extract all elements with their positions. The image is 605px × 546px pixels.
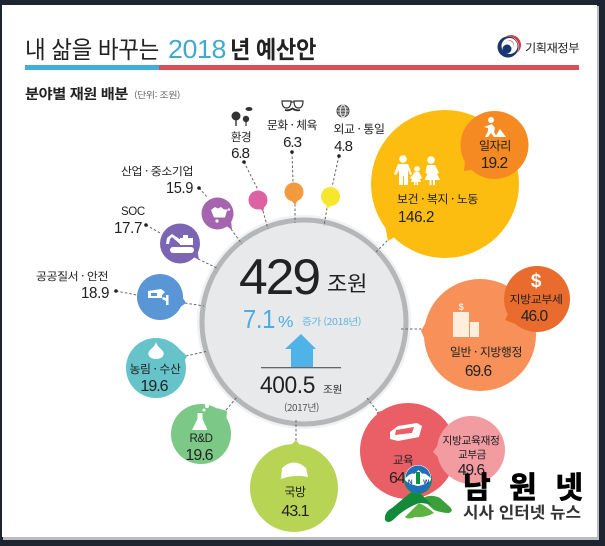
title [25, 30, 316, 65]
bubble: R&D: 19.6 [185, 447, 214, 464]
icon: onion [148, 342, 164, 359]
bubble: 지방교육재정 교부금: 지방교육재정 [442, 433, 500, 448]
bubble: 지방교부세: 46.0 [521, 308, 548, 325]
bubble: 문화 체육: 6.3 [283, 134, 302, 151]
increase rate: 7.1 [243, 304, 275, 334]
icon: excavator [166, 234, 194, 253]
logo mounds [385, 492, 452, 522]
bubble: 국방 [250, 440, 338, 532]
title: 년 예산안 [230, 30, 316, 65]
icon: worker [484, 117, 506, 137]
bubble: 산업 중소기업: 15.9 [166, 180, 193, 197]
title rule [25, 65, 579, 70]
bubble: 농림 수산: 19.6 [140, 378, 169, 395]
title: 내 삶을 바꾸는 [25, 30, 159, 65]
bubble: SOC: 17.7 [114, 220, 142, 237]
icon: books [390, 423, 422, 441]
connector lines [114, 150, 422, 441]
bubble: 국방: 국방 [284, 483, 306, 500]
bubble: 교육 [360, 403, 456, 499]
bubble: 지방교부세: 지방교부세 [510, 291, 562, 307]
icon: family [394, 155, 440, 185]
bubble: R&D: R&D [189, 433, 213, 445]
bubble: 외교 통일: 4.8 [334, 138, 353, 155]
icon: globe [337, 105, 349, 117]
bubble: 외교 통일 [321, 105, 384, 209]
total amount: 429 [239, 249, 319, 305]
icon: buildings: $ [459, 302, 464, 312]
bubble: 환경: 6.8 [231, 145, 250, 162]
bubble: 공공질서 안전 [36, 268, 186, 320]
bubble: 지방교육재정 교부금 [433, 416, 505, 484]
bubble: 일자리: 일자리 [479, 137, 511, 154]
logo badge: N [408, 479, 413, 486]
increase rate: 증가 (2018년) [302, 314, 361, 328]
bubble: 문화 체육: 문화 · 체육 [267, 117, 317, 133]
prior year amount: (2017년) [284, 400, 319, 414]
section heading [25, 84, 181, 104]
bubble: 문화 체육 [267, 101, 317, 205]
total amount: 조원 [327, 268, 367, 298]
bubble: 산업 중소기업 [121, 163, 234, 230]
prior year amount [260, 372, 342, 414]
bubble: 산업 중소기업: 산업 · 중소기업 [121, 163, 193, 179]
bubble: 국방: 43.1 [281, 503, 310, 520]
bubble: 교육: 교육 [393, 452, 413, 468]
prior year amount: 조원 [323, 381, 342, 396]
bubble: 일반 지방행정: 일반 · 지방행정 [450, 344, 522, 360]
bubble: 보건 복지 노동: 146.2 [398, 209, 434, 226]
logo wordmark: 시사 인터넷 뉴스 [463, 499, 581, 523]
bubble: 지방교육재정 교부금: 49.6 [458, 462, 484, 479]
bubble: SOC: SOC [121, 206, 145, 218]
icon: glasses and mustache [282, 101, 303, 110]
bubble: 농림 수산 [126, 338, 187, 398]
bubble: 공공질서 안전: 18.9 [81, 285, 109, 302]
section heading: 분야별 재원 배분 [25, 84, 129, 104]
bubble: 지방교부세 [504, 266, 570, 332]
icon: security camera [148, 289, 168, 305]
icon: military cap [281, 462, 308, 479]
bubble: 교육: 64 [389, 470, 406, 487]
arrow up [285, 334, 316, 368]
icon: flask [192, 404, 209, 430]
bubble: 환경 [231, 107, 268, 212]
bubble: 일반 지방행정: 69.6 [465, 363, 491, 380]
logo wordmark: 남원넷 [463, 463, 583, 507]
bubble: 지방교육재정 교부금: 교부금 [458, 447, 487, 462]
icon: mine cart [211, 207, 230, 223]
bubble: 일반 지방행정 [421, 279, 536, 391]
increase rate: % [278, 314, 293, 331]
bubble: SOC [114, 206, 200, 264]
bubble: 보건 복지 노동 [371, 110, 519, 258]
ministry logo [498, 35, 579, 58]
bubble: 농림 수산: 농림 · 수산 [130, 361, 181, 377]
bubble: 공공질서 안전: 공공질서 · 안전 [36, 268, 108, 284]
bubble: 보건 복지 노동: 보건 · 복지 · 노동 [397, 191, 478, 207]
increase rate [243, 304, 361, 334]
icon: trees [232, 107, 252, 126]
title: 2018 [168, 34, 226, 64]
icon: dollar: $ [531, 271, 542, 292]
center circle [197, 215, 411, 429]
bubble: 환경: 환경 [231, 129, 251, 145]
section heading: (단위: 조원) [134, 89, 181, 101]
bubble: R&D [171, 404, 231, 464]
prior year amount: 400.5 [260, 372, 315, 399]
watermark logo [385, 463, 583, 523]
bubble: 외교 통일: 외교 · 통일 [334, 121, 384, 137]
ministry logo: 기획재정부 [525, 40, 579, 56]
bubble: 일자리: 19.2 [481, 155, 507, 172]
total amount [239, 249, 367, 305]
bubble: 일자리 [460, 111, 528, 179]
logo badge [404, 465, 432, 494]
logo badge: W [423, 479, 430, 486]
